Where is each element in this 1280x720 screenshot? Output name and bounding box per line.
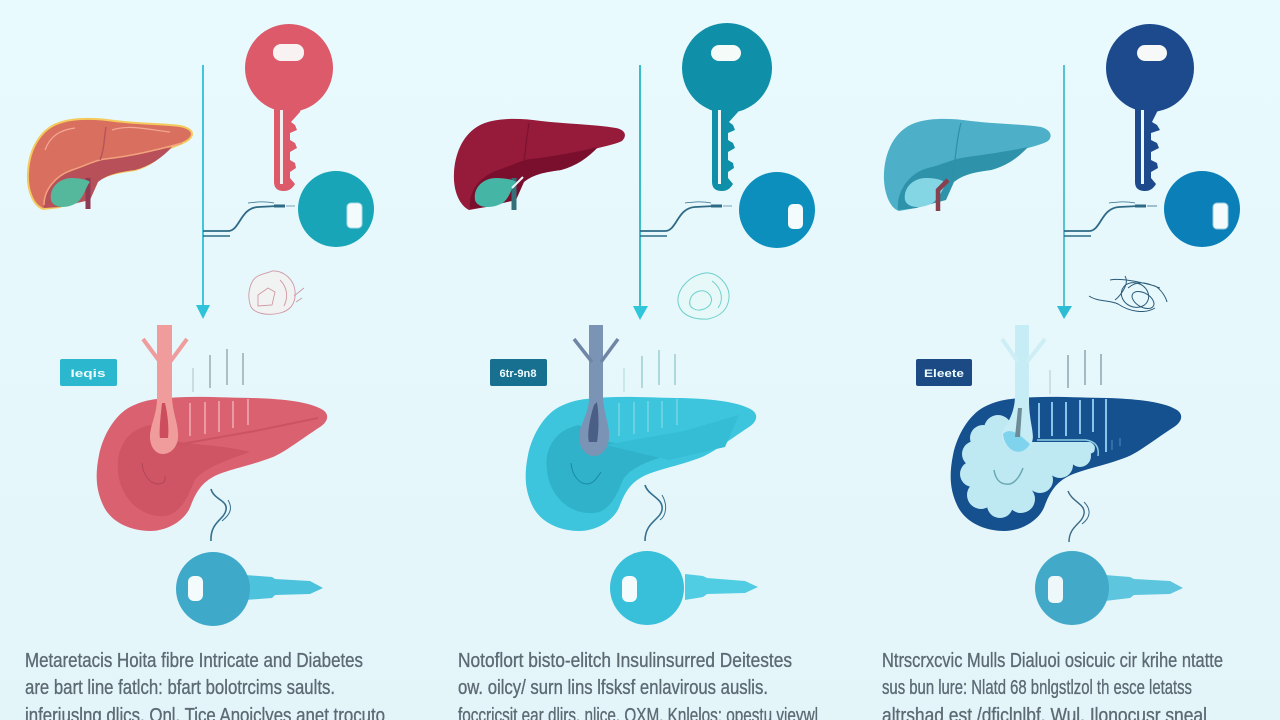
icon: small liver, blue xyxy=(884,119,1051,211)
text block xyxy=(25,650,385,720)
icon: large teal key xyxy=(682,23,772,191)
label chip: Eleete xyxy=(924,368,964,380)
icon: blue round disc xyxy=(739,172,815,248)
icon: blue round disc xyxy=(1164,171,1240,247)
text block: Metaretacis Hoita fibre Intricate and Diabetes xyxy=(25,650,363,672)
connector: wire xyxy=(640,202,732,236)
icon: large navy key xyxy=(1106,24,1194,191)
icon: large red key xyxy=(245,24,333,191)
connector: squiggle xyxy=(645,485,666,541)
icon: small liver, crimson xyxy=(454,119,625,210)
connector: squiggle xyxy=(1068,491,1089,542)
icon: doodle nodule xyxy=(249,271,304,314)
text block xyxy=(458,650,818,720)
connector: wire xyxy=(1064,202,1157,236)
text block: Notoflort bisto-elitch Insulinsurred Deitestes xyxy=(458,650,792,672)
label chip: Ieqis xyxy=(70,368,106,380)
icon: doodle nodule xyxy=(678,273,729,319)
panel: right column, navy xyxy=(882,24,1240,720)
icon: teal round disc xyxy=(298,171,374,247)
text block: are bart line fatlch: bfart bolotrcims saults. xyxy=(25,677,335,699)
icon: large red liver xyxy=(97,325,327,531)
text block xyxy=(882,650,1223,720)
icon: lower blue key xyxy=(176,552,323,626)
label chip: 6tr-9n8 xyxy=(500,368,536,380)
label chip xyxy=(490,359,547,386)
icon: large navy liver with fatty deposit xyxy=(951,325,1181,531)
text block: ow. oilcy/ surn lins lfsksf enlavirous auslis. xyxy=(458,677,768,699)
label chip xyxy=(60,359,117,386)
connector: wire xyxy=(203,202,295,236)
icon: lower cyan key xyxy=(610,551,758,625)
arrow: vertical cyan xyxy=(1057,65,1072,319)
panel: left column, red xyxy=(25,24,385,720)
label chip xyxy=(916,359,972,386)
icon: doodle tangle xyxy=(1089,276,1167,312)
icon: large cyan liver xyxy=(526,325,756,531)
panel: middle column, teal xyxy=(454,23,818,720)
arrow: vertical cyan xyxy=(633,65,648,320)
connector: squiggle xyxy=(211,489,230,541)
icon: lower blue key xyxy=(1035,551,1183,625)
arrow: vertical cyan xyxy=(196,65,210,319)
icon: small liver, red-orange xyxy=(28,119,192,209)
